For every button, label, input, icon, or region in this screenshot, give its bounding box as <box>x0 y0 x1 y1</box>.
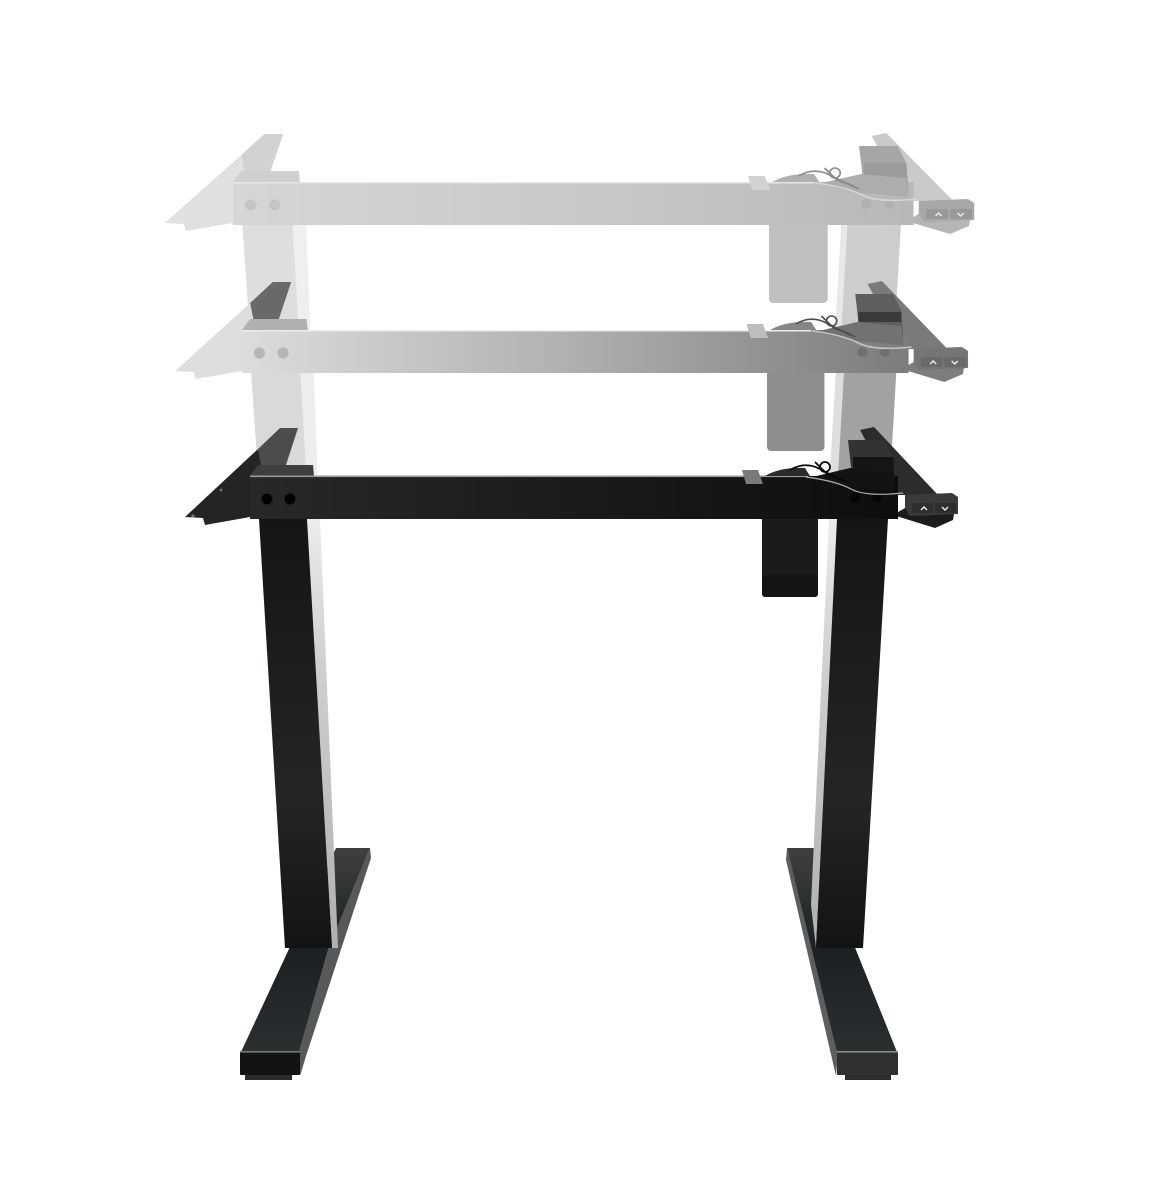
right foot <box>786 848 898 1080</box>
control keypad <box>905 493 958 516</box>
middle frame crossbar <box>242 330 909 373</box>
bottom frame: lowest position, solid black <box>185 427 958 1080</box>
top frame right bracket <box>872 133 971 234</box>
motor housing <box>762 515 818 597</box>
middle frame motor housing <box>767 369 824 451</box>
middle frame controller box <box>855 294 903 338</box>
middle frame control keypad <box>914 347 968 370</box>
middle frame right bracket <box>868 281 965 382</box>
cables <box>765 462 903 494</box>
top frame mounting plate <box>233 171 300 182</box>
middle frame mounting plate <box>242 319 308 330</box>
top frame cables <box>772 168 917 200</box>
top frame motor housing <box>769 221 828 303</box>
top frame right leg <box>835 225 901 331</box>
top frame left bracket <box>165 134 283 231</box>
mounting plate <box>250 465 314 476</box>
top frame control keypad <box>919 199 974 222</box>
right bracket <box>860 427 955 528</box>
middle frame left leg <box>251 373 318 479</box>
top frame controller box <box>859 146 908 190</box>
top frame left leg <box>242 225 310 331</box>
left bracket <box>185 428 298 525</box>
controller box <box>848 440 895 484</box>
top frame crossbar <box>233 182 914 225</box>
middle frame small plate <box>747 324 768 338</box>
right leg <box>811 519 888 948</box>
middle frame cables <box>770 316 912 348</box>
small plate <box>742 470 763 484</box>
middle frame left bracket <box>175 282 291 379</box>
top frame small plate <box>748 176 770 190</box>
left leg <box>259 519 338 948</box>
middle frame: intermediate position, semi-faded <box>175 281 968 479</box>
middle frame right leg <box>830 373 896 479</box>
crossbar <box>250 476 898 519</box>
left foot <box>240 848 371 1080</box>
top frame: highest position, faintest <box>165 133 974 331</box>
